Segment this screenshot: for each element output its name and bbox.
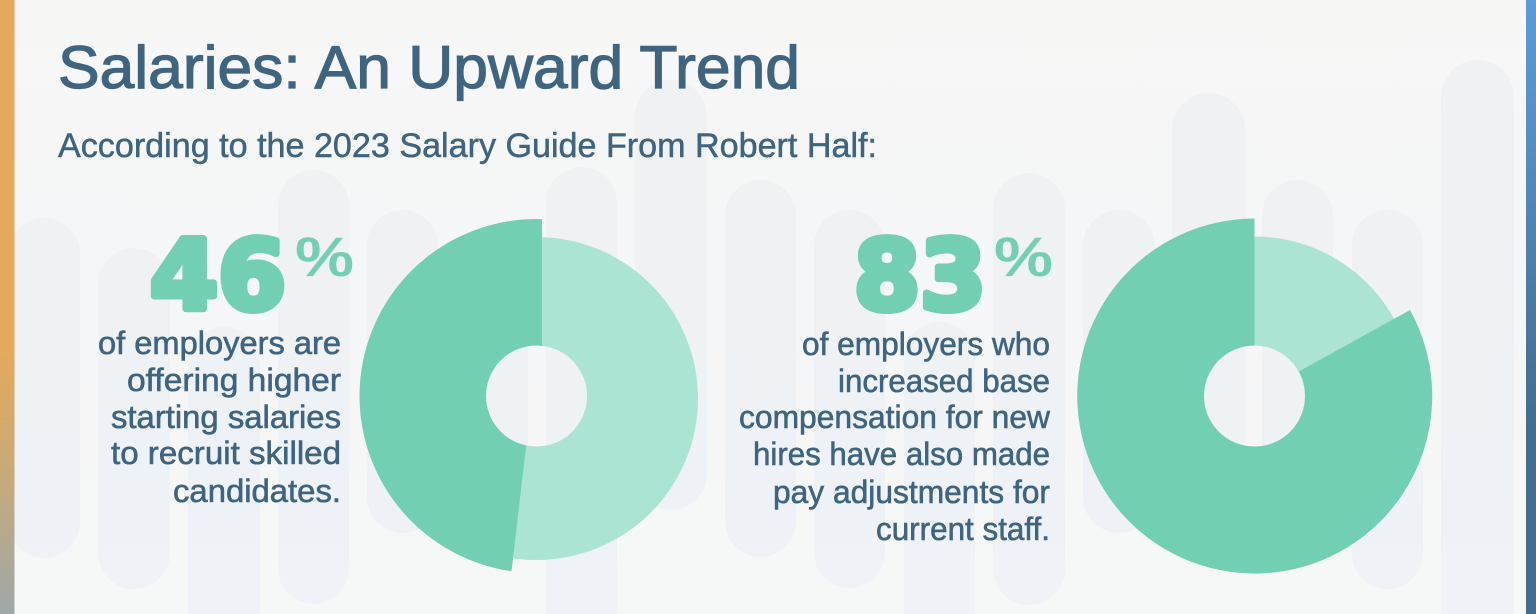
description text: to recruit skilled (111, 435, 341, 471)
big number 46: 46 (150, 220, 286, 332)
description text: current staff. (876, 511, 1050, 547)
description text: offering higher (127, 362, 341, 398)
description text: pay adjustments for (773, 474, 1050, 510)
remainder segment (1254, 236, 1394, 372)
description text: of employers are (98, 325, 341, 361)
description text (739, 326, 1051, 547)
83 percent segment (1077, 218, 1432, 573)
46 percent segment (360, 219, 542, 571)
description text: candidates. (173, 473, 341, 509)
description text: hires have also made (753, 436, 1050, 472)
left accent edge (0, 0, 14, 614)
title: Salaries: An Upward Trend (58, 34, 800, 101)
percent sign: % (994, 225, 1053, 288)
percent sign: % (295, 225, 354, 288)
subtitle: According to the 2023 Salary Guide From Robert Half: (58, 127, 877, 165)
big number 83: 83 (854, 220, 986, 332)
description text: starting salaries (111, 399, 341, 435)
panel: 83 percent statistic (739, 220, 1053, 547)
description text (98, 325, 341, 509)
description text: compensation for new (739, 399, 1051, 435)
description text: of employers who (802, 326, 1050, 362)
donut chart: 46 percent (360, 219, 698, 571)
donut chart: 83 percent (1077, 218, 1432, 573)
panel: 46 percent statistic (98, 220, 354, 509)
right accent edge (1526, 0, 1536, 614)
remainder segment (513, 237, 698, 560)
description text: increased base (838, 363, 1050, 399)
